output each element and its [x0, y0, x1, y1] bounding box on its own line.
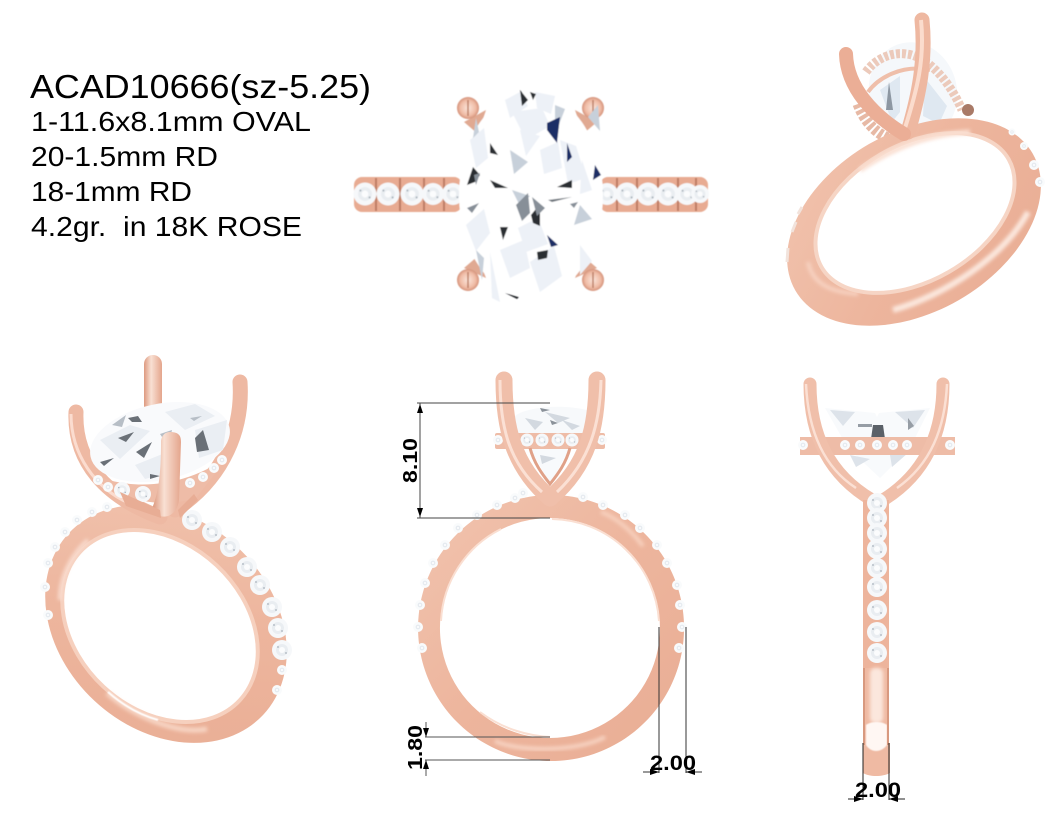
halo gallery with stones [493, 433, 607, 449]
front prong [120, 432, 198, 518]
band [0, 457, 335, 791]
pave stones on band [787, 128, 1045, 262]
ring: side elevation with dimensions [798, 384, 955, 802]
spec: oval stone: 1-11.6x8.1mm OVAL [31, 106, 311, 137]
ring: front three-quarter view [0, 355, 335, 791]
oval diamond [83, 390, 237, 494]
prongs [806, 384, 947, 500]
dimension: 2.00 shank width [848, 743, 905, 802]
oval diamond [459, 90, 603, 302]
dimension: 1.80 [405, 722, 550, 776]
dimension: 2.00 band width: 2.00 [650, 752, 696, 775]
knife-edge band [750, 76, 1056, 368]
prongs [500, 380, 601, 498]
dimension: 8.10: 8.10 [400, 438, 422, 483]
specification text block [30, 68, 371, 242]
spec: 1mm rounds: 18-1mm RD [31, 176, 192, 207]
stone and halo behind band [858, 34, 966, 168]
dimension: 1.80: 1.80 [405, 725, 427, 770]
title: model number: ACAD10666(sz-5.25) [30, 68, 371, 105]
pave stones on band [413, 488, 687, 653]
dimension: 2.00 band width [643, 627, 702, 775]
prongs [457, 97, 604, 291]
halo gallery with stones [798, 437, 955, 455]
band [863, 500, 890, 776]
dimension: 2.00 shank width: 2.00 [855, 779, 901, 802]
ring: front elevation with dimensions [400, 380, 702, 776]
spec: 1.5mm rounds: 20-1.5mm RD [31, 141, 218, 172]
spec: weight and metal: 4.2gr. in 18K ROSE [31, 211, 302, 242]
dimension: 8.10 [400, 403, 550, 518]
prongs [846, 20, 974, 134]
pave stones on band [867, 493, 887, 663]
ring: top view [354, 90, 709, 302]
ring: back three-quarter view [750, 20, 1056, 368]
back and side prongs [71, 355, 240, 517]
band [418, 495, 684, 761]
left shank with stones [354, 177, 464, 212]
diamond [513, 407, 587, 484]
right shank with stones [596, 177, 709, 212]
diamond [825, 408, 930, 478]
halo with stones [93, 452, 232, 503]
pave stones on band [40, 502, 292, 695]
